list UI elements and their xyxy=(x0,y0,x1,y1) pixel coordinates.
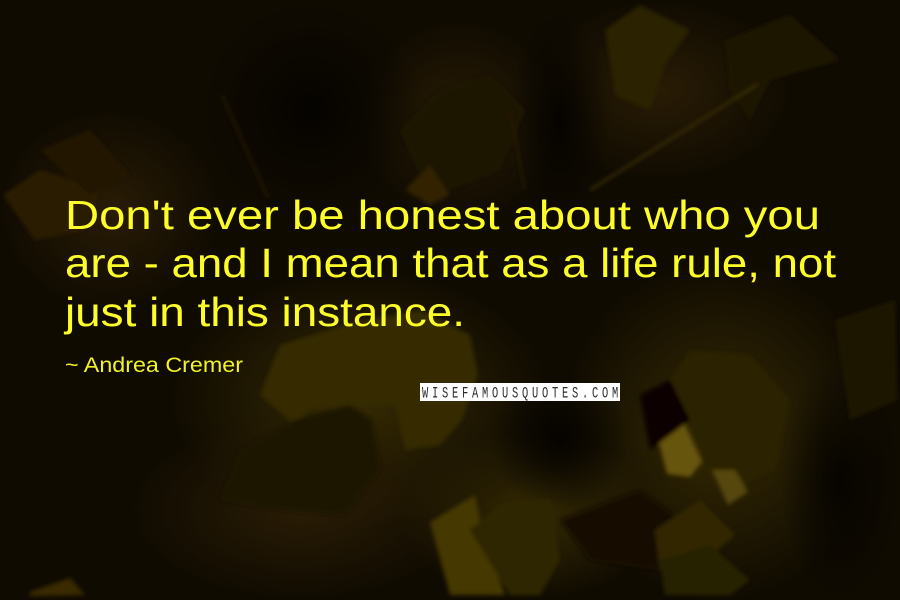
quote text: are - and I mean that as a life rule, not xyxy=(65,240,837,286)
watermark: WISEFAMOUSQUOTES.COM xyxy=(422,386,618,403)
quote text xyxy=(64,192,837,335)
quote text: Don't ever be honest about who you xyxy=(65,192,820,238)
quote text: just in this instance. xyxy=(64,289,465,335)
attribution: ~ Andrea Cremer xyxy=(65,354,243,377)
